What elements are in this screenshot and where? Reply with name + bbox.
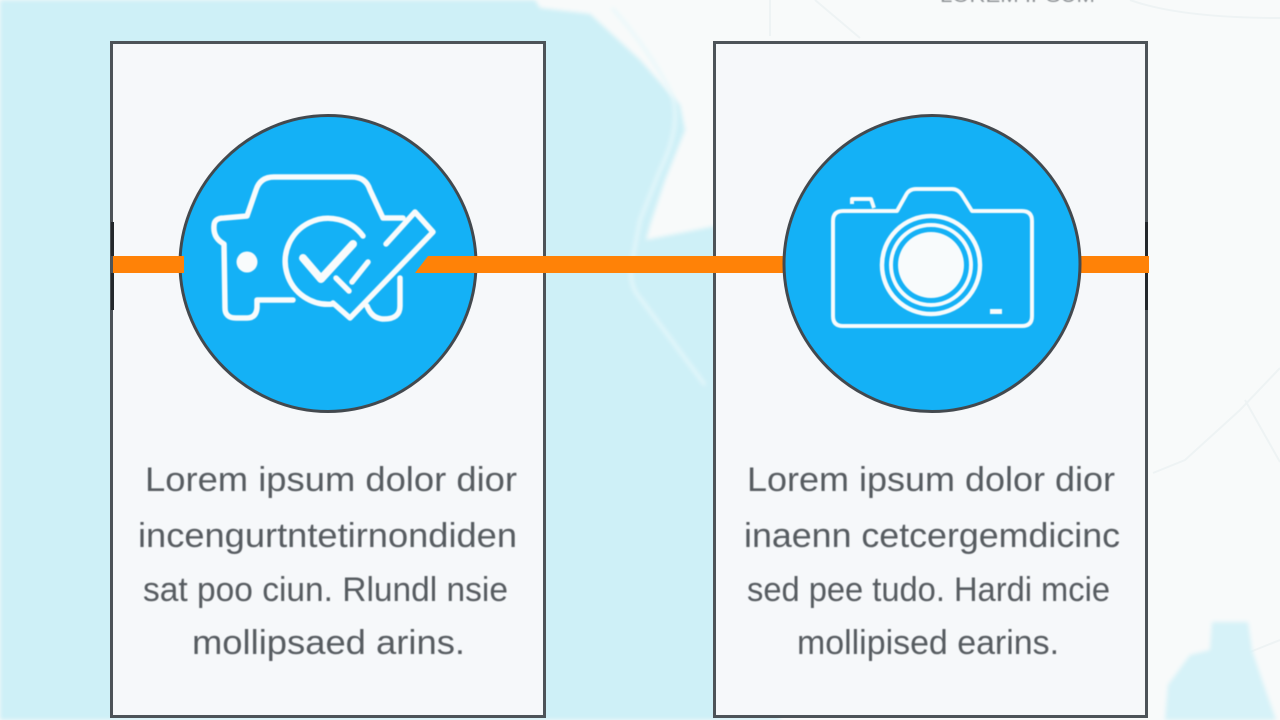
text block: right card xyxy=(744,461,1120,662)
text block: left card xyxy=(138,461,517,662)
text block: right card: sed pee tudo. Hardi mcie xyxy=(747,571,1110,609)
text block: right card: Lorem ipsum dolor dior xyxy=(747,461,1115,499)
text block: right card: inaenn cetcergemdicinc xyxy=(744,517,1120,555)
text block: left card: incengurtntetirnondiden xyxy=(138,517,517,555)
panel: left card xyxy=(112,42,544,716)
panel: right card xyxy=(714,42,1146,716)
icon: camera xyxy=(784,116,1080,412)
icon: car with check badge xyxy=(178,116,478,412)
text block: left card: Lorem ipsum dolor dior xyxy=(145,461,517,499)
connector: orange line xyxy=(111,222,1149,310)
text block: left card: mollipsaed arins. xyxy=(192,624,465,662)
text block: right card: mollipised earins. xyxy=(797,624,1059,662)
text block: left card: sat poo ciun. Rlundl nsie xyxy=(143,571,508,609)
